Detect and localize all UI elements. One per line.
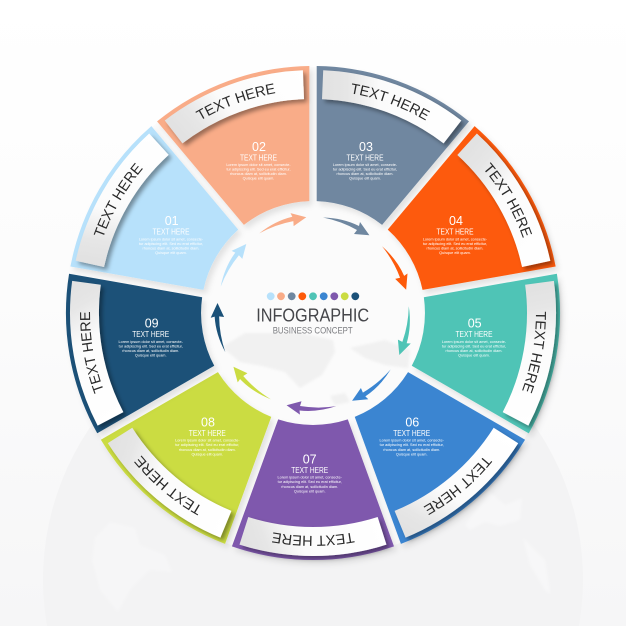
text 02: tur adipiscing elit. Sed eu erat efficitur, (226, 168, 291, 172)
text 07: 07 (303, 452, 317, 466)
text 05: rhoncus diam at, sollicitudin diam. (446, 349, 502, 353)
colour dots (267, 292, 359, 300)
text 02: Quisque elit quam. (243, 177, 274, 181)
hub backing disc (67, 67, 559, 559)
text 09: Lorem ipsum dolor sit amet, consecte- (119, 340, 184, 344)
hub world map (222, 333, 410, 405)
text 06: TEXT HERE (393, 428, 430, 438)
text 05: Lorem ipsum dolor sit amet, consecte- (442, 340, 507, 344)
banner text 08: TEXT HERE (134, 456, 200, 516)
text 01: rhoncus diam at, sollicitudin diam. (143, 246, 199, 250)
text 04: rhoncus diam at, sollicitudin diam. (427, 246, 483, 250)
text 04: tur adipiscing elit. Sed eu erat efficitur, (423, 242, 487, 246)
panel 05 (412, 274, 564, 437)
arrow 03 (323, 218, 369, 235)
globe backdrop (43, 310, 583, 626)
banner 02 (164, 32, 318, 177)
text 09: tur adipiscing elit. Sed eu erat efficitur, (119, 345, 183, 349)
text 03: tur adipiscing elit. Sed eu erat efficitur, (333, 168, 397, 172)
banner text 07: TEXT HERE (272, 532, 355, 546)
text 08: rhoncus diam at, sollicitudin diam. (179, 448, 236, 452)
banner text 02: TEXT HERE (196, 83, 276, 119)
arrow 09 (202, 303, 241, 352)
text 06: tur adipiscing elit. Sed eu erat efficitur, (380, 443, 444, 447)
banner 08 (91, 422, 247, 538)
text 07: tur adipiscing elit. Sed eu erat efficitur, (278, 480, 342, 484)
text 04: TEXT HERE (436, 226, 474, 236)
text 05: TEXT HERE (456, 329, 493, 339)
panel 01 (70, 126, 240, 294)
text 04: 04 (449, 214, 463, 228)
text 02: rhoncus diam at, sollicitudin diam. (230, 172, 287, 176)
panel 03 (316, 66, 471, 228)
text 01 (139, 214, 204, 255)
arrow 08 (227, 367, 277, 399)
text 07: Quisque elit quam. (294, 490, 326, 494)
centre title: INFOGRAPHIC (256, 304, 369, 326)
text 06 (380, 415, 445, 456)
text 05: tur adipiscing elit. Sed eu erat efficitur, (442, 345, 506, 349)
text 08: tur adipiscing elit. Sed eu erat efficitur, (175, 443, 239, 447)
text 07 (278, 452, 343, 494)
banner 09 (29, 269, 162, 427)
banner 05 (482, 280, 578, 430)
text 04: Quisque elit quam. (439, 251, 471, 255)
text 02 (226, 140, 291, 181)
centre subtitle: BUSINESS CONCEPT (273, 325, 353, 335)
text 05: Quisque elit quam. (458, 354, 490, 358)
arrow 05 (391, 306, 417, 355)
arrow 04 (371, 246, 418, 290)
text 06: Quisque elit quam. (396, 452, 428, 456)
text 06: 06 (405, 415, 419, 429)
text 07: TEXT HERE (291, 465, 328, 475)
text 04: Lorem ipsum dolor sit amet, consecte- (423, 238, 488, 242)
arrow 07 (287, 389, 336, 422)
arrow 01 (221, 241, 246, 290)
text 05: 05 (468, 316, 482, 330)
banner 04 (429, 133, 583, 278)
text 01: tur adipiscing elit. Sed eu erat efficitur, (139, 242, 203, 246)
panel 07 (232, 419, 397, 566)
text 08 (175, 415, 240, 456)
text 03: Lorem ipsum dolor sit amet, consecte- (333, 163, 398, 167)
text 03: Quisque elit quam. (349, 177, 381, 181)
text 08: Lorem ipsum dolor sit amet, consecte- (175, 439, 240, 443)
text 01: Lorem ipsum dolor sit amet, consecte- (139, 238, 204, 242)
text 02: TEXT HERE (240, 152, 277, 162)
text 08: Quisque elit quam. (191, 452, 223, 456)
text 03: TEXT HERE (346, 152, 384, 162)
panel 06 (354, 372, 528, 548)
text 03: 03 (359, 140, 373, 154)
text 06: Lorem ipsum dolor sit amet, consecte- (380, 439, 445, 443)
banner text 05: TEXT HERE (522, 312, 546, 394)
text 01: 01 (165, 214, 179, 228)
banner 03 (322, 70, 461, 143)
arrow 06 (352, 361, 391, 410)
text 09 (119, 316, 184, 358)
text 05 (442, 316, 507, 358)
text 09: TEXT HERE (132, 329, 169, 339)
text 08: 08 (201, 415, 215, 429)
text 01: Quisque elit quam. (155, 251, 187, 255)
banner text 01: TEXT HERE (94, 162, 143, 235)
text 09: Quisque elit quam. (135, 354, 167, 358)
arrow ring (202, 204, 418, 422)
text 03: rhoncus diam at, sollicitudin diam. (337, 172, 393, 176)
banner 06 (386, 406, 519, 563)
text 02: 02 (252, 140, 266, 154)
text 03 (333, 140, 398, 181)
panel 04 (388, 126, 559, 294)
text 07: Lorem ipsum dolor sit amet, consecte- (278, 476, 343, 480)
text 04 (423, 214, 488, 255)
banner text 06: TEXT HERE (424, 458, 492, 515)
text 02: Lorem ipsum dolor sit amet, consecte- (226, 163, 291, 167)
banner text 03: TEXT HERE (352, 83, 430, 120)
text 07: rhoncus diam at, sollicitudin diam. (281, 485, 338, 489)
text 06: rhoncus diam at, sollicitudin diam. (383, 448, 440, 452)
text 01: TEXT HERE (152, 226, 190, 236)
banner text 09: TEXT HERE (80, 312, 103, 394)
banner 01 (75, 125, 172, 275)
banner text 04: TEXT HERE (485, 162, 532, 238)
text 08: TEXT HERE (189, 428, 226, 438)
panel 08 (100, 372, 274, 548)
arrow 02 (259, 204, 306, 247)
panel 09 (66, 274, 217, 436)
panel 02 (157, 66, 314, 228)
text 09: 09 (145, 316, 159, 330)
text 09: rhoncus diam at, sollicitudin diam. (122, 349, 179, 353)
banner 07 (232, 475, 388, 592)
